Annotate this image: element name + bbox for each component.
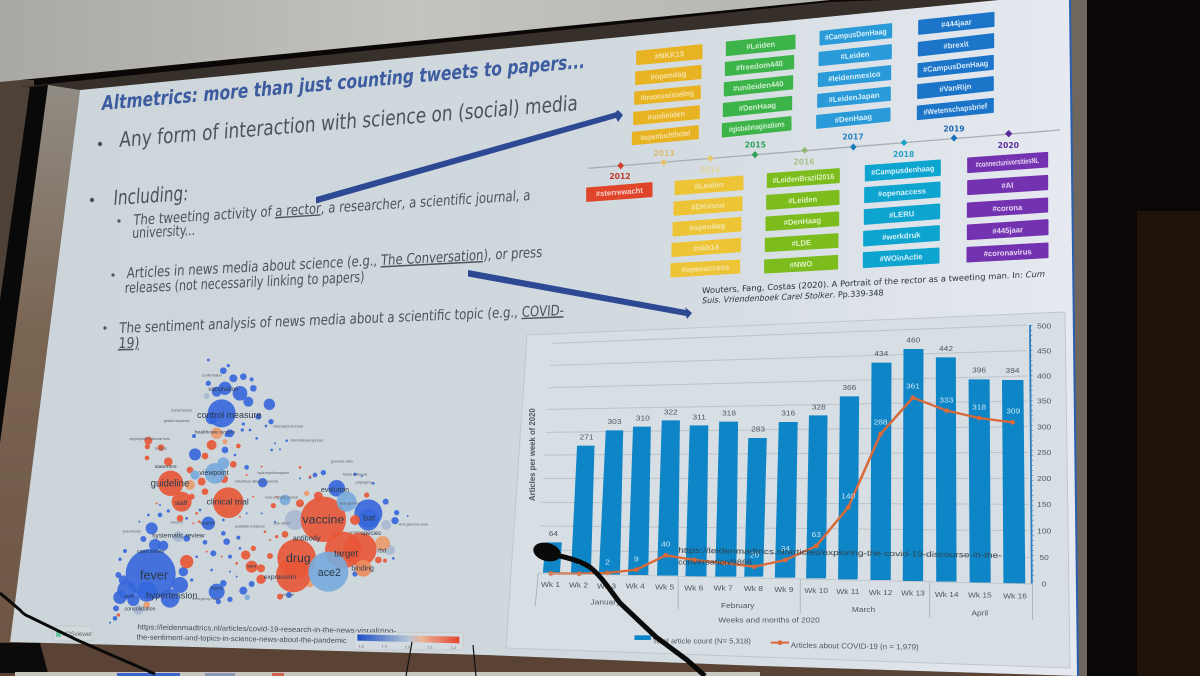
binding bubble xyxy=(355,560,372,577)
milestone: 2019: 2019 xyxy=(943,124,965,133)
small topic labels: international travel xyxy=(273,424,303,428)
small topic labels: viral genome xyxy=(340,501,360,505)
x axis week and month labels: Wk 16 xyxy=(1003,592,1027,601)
source URL for the bubble map xyxy=(137,622,397,645)
tag: #LDE xyxy=(791,238,811,248)
bar value labels: 271 xyxy=(580,433,594,442)
right axis: 350 xyxy=(1037,397,1052,406)
tag: #LERU xyxy=(889,209,915,220)
sub-bullet: sentiment analysis: 19) xyxy=(118,336,140,352)
bullet: including xyxy=(90,181,189,210)
sub-bullet: tweeting activity: The tweeting activity of a rector, a researcher, a scientific journal, a xyxy=(132,187,531,229)
milestone: 2012 xyxy=(609,162,631,181)
large topic labels: ards xyxy=(124,594,135,600)
large topic labels: search xyxy=(200,520,215,526)
tag: #CampusDenHaag xyxy=(923,59,989,74)
sub-bullet: news articles: releases (not necessarily linking to papers) xyxy=(124,270,365,297)
line: articles about COVID-19 xyxy=(548,395,1015,576)
overlaid chart URL: https://leidenmadtrics.nl/articles/exploring-the-covid-19-discourse-in-the- xyxy=(678,546,1002,560)
tag: #DenHaag xyxy=(834,112,873,125)
small topic labels xyxy=(123,374,428,601)
hashtag column 2020 xyxy=(967,153,1048,262)
large topic labels: drug xyxy=(286,551,311,565)
tag: #unileiden440 xyxy=(733,79,784,93)
small topic labels: emergency room xyxy=(192,597,220,601)
bar and line chart xyxy=(528,322,1052,652)
blue bubbles xyxy=(109,359,409,624)
tag: #Leiden xyxy=(694,180,724,191)
light bubbles xyxy=(133,393,395,615)
x axis week and month labels: Wk 9 xyxy=(774,585,794,594)
milestone: 2014: 2014 xyxy=(699,166,720,175)
timeline axis xyxy=(588,130,1060,168)
milestone: 2017 xyxy=(842,133,864,151)
line value labels: 2 xyxy=(605,558,610,566)
tag: #Leiden xyxy=(746,40,776,51)
bullet: any form of interaction xyxy=(98,90,579,152)
tag: #coronavirus xyxy=(983,247,1032,258)
small topic labels: phylogeny xyxy=(356,480,373,484)
hashtag column 2016 xyxy=(765,169,839,273)
bubble map of topics xyxy=(109,359,428,624)
right axis: 250 xyxy=(1037,448,1052,457)
colour scale legend: 2.1 xyxy=(427,644,434,649)
x axis week and month labels: March xyxy=(852,605,875,614)
large topic labels: antibody xyxy=(293,533,321,542)
bar value labels: 396 xyxy=(972,366,987,375)
overlaid chart URL: conversation/9866 xyxy=(678,558,753,566)
x axis week and month labels: Wk 13 xyxy=(901,589,925,598)
large topic labels: viewpoint xyxy=(199,470,229,477)
small topic labels: surgery xyxy=(155,446,167,450)
tag: #connectuniversitiesNL xyxy=(975,156,1039,169)
tag: #werkdruk xyxy=(882,230,921,242)
milestone: 2019 xyxy=(943,124,965,142)
red bubbles xyxy=(117,437,387,617)
x axis week and month labels: Wk 14 xyxy=(935,590,959,599)
tag: #Campusdenhaag xyxy=(871,164,935,177)
tag: #DKvsnu xyxy=(691,200,725,212)
small topic labels: new england journal xyxy=(265,495,298,499)
x axis week and month labels: January xyxy=(591,598,620,607)
title: Altmetrics: more than just counting tweets to papers... xyxy=(100,50,585,115)
large topic labels: healthcare system xyxy=(195,429,235,435)
tag: #openaccess xyxy=(681,263,730,274)
arrow: rector to timeline xyxy=(316,110,623,204)
large topic labels: injury xyxy=(211,585,223,591)
bar value labels: 64 xyxy=(549,529,559,538)
small topic labels: infectious diseases journal xyxy=(235,480,278,484)
tag: #openaccess xyxy=(878,186,926,199)
tag: #leidenmexico xyxy=(828,69,881,84)
tag: #nkk14 xyxy=(693,242,720,253)
source URL for the bubble map: https://leidenmadtrics.nl/articles/covid-19-research-in-the-news-visualizing- xyxy=(137,622,397,635)
hashtag column 2014 xyxy=(671,176,743,277)
milestone: 2013 xyxy=(653,149,675,166)
large topic labels: consolidation xyxy=(124,606,156,612)
x axis week and month labels: Wk 6 xyxy=(684,584,704,592)
sub-bullet: sentiment analysis xyxy=(103,303,564,352)
small topic labels: international spread xyxy=(291,438,323,442)
milestone: 2018 xyxy=(893,139,914,159)
line value labels: 309 xyxy=(1006,407,1021,415)
x axis week and month labels: Wk 15 xyxy=(968,591,992,600)
chart legend: Total article count (N= 5,318) xyxy=(653,637,751,645)
citation: Wouters, Fang, Costas (2020). A Portrait of the rector as a tweeting man. In: Cum xyxy=(702,269,1045,295)
milestone: 2015 xyxy=(745,141,766,158)
right axis: 0 xyxy=(1042,580,1047,589)
line value labels: 288 xyxy=(874,418,888,427)
sub-bullet: tweeting activity: university... xyxy=(132,223,196,242)
tag: #sterrewacht xyxy=(595,186,644,199)
right axis: 300 xyxy=(1037,423,1052,431)
tag: #VanRijn xyxy=(939,82,972,94)
tag: #Leiden xyxy=(840,50,870,61)
tag: #DenHaag xyxy=(738,100,777,113)
small topic labels: future outbreak xyxy=(343,472,367,476)
x axis week and month labels: February xyxy=(721,601,754,610)
tag: #troonswisseling xyxy=(640,88,695,103)
large topic labels: evolution xyxy=(321,487,349,494)
x axis week and month labels: Wk 4 xyxy=(626,582,645,591)
bar value labels: 283 xyxy=(751,425,766,434)
source URL for the bubble map: the-sentiment-and-topics-in-science-news-about-the-pandemic xyxy=(137,632,347,645)
small topic labels: pneumonia xyxy=(123,530,142,534)
citation: Suis. Vriendenboek Carel Stolker. Pp.339-348 xyxy=(702,287,884,305)
tag: #Leiden xyxy=(788,195,818,206)
tag: #444jaar xyxy=(941,17,972,30)
large topic labels: vaccination xyxy=(208,387,238,393)
large topic labels: target xyxy=(334,548,358,558)
right axis: 450 xyxy=(1037,347,1052,355)
line value labels: 0 xyxy=(577,558,582,567)
colour scale legend: 1.9 xyxy=(382,644,388,649)
hashtag column 2019 xyxy=(918,13,994,119)
bar value labels: 311 xyxy=(693,413,706,421)
small topic labels: appropriate national form xyxy=(130,437,170,441)
small topic labels: protein xyxy=(349,530,361,534)
hashtag column 2015 xyxy=(723,35,795,137)
bar value labels: 394 xyxy=(1006,366,1020,375)
large topic labels: rbd xyxy=(377,549,386,555)
bar value labels: 316 xyxy=(781,409,796,417)
right axis: 200 xyxy=(1037,474,1052,483)
bar value labels: 366 xyxy=(842,383,857,392)
small topic labels: viral genome level xyxy=(399,523,428,527)
bar value labels: 310 xyxy=(636,414,650,423)
arrow: The Conversation to chart xyxy=(468,270,692,319)
line value labels xyxy=(577,382,1021,567)
VOSviewer logo xyxy=(53,626,93,641)
line value labels: 318 xyxy=(972,403,987,411)
tag: #CampusDenHaag xyxy=(824,27,887,42)
large topic labels: systematic review xyxy=(152,532,205,539)
x axis week and month labels: Wk 12 xyxy=(869,588,893,597)
large topic labels: bat xyxy=(363,512,376,522)
line value labels: 63 xyxy=(812,530,821,539)
x axis week and month labels: Wk 8 xyxy=(744,584,763,593)
milestone: 2014 xyxy=(699,155,720,175)
hashtag column 2018 xyxy=(864,160,940,267)
colour scale legend: 2.2 xyxy=(451,645,457,650)
x axis week and month labels: Wk 2 xyxy=(569,581,589,590)
VOSviewer logo: VOSviewer xyxy=(62,632,92,638)
ceiling beam above the screen xyxy=(0,0,830,82)
x axis week and month labels: Wk 5 xyxy=(655,583,675,591)
x axis title: Weeks and months of 2020 xyxy=(718,616,820,625)
tag: #NWO xyxy=(789,259,813,270)
bar value labels: 322 xyxy=(664,408,678,417)
milestone: 2017: 2017 xyxy=(842,133,864,142)
chart legend: Articles about COVID-19 (n = 1,979) xyxy=(791,641,919,652)
bars: total article count xyxy=(543,349,1025,583)
colour scale legend xyxy=(354,633,463,650)
milestone: 2015: 2015 xyxy=(745,141,766,150)
tag: #LeidenJapan xyxy=(828,90,880,105)
large topic labels: guideline xyxy=(151,479,189,490)
light blue bubbles xyxy=(190,457,357,600)
sub-bullet: news articles xyxy=(111,244,543,297)
milestone: 2016: 2016 xyxy=(793,158,815,167)
small topic labels: confirmation xyxy=(202,374,222,378)
x axis week and month labels: Wk 3 xyxy=(597,582,617,590)
overlaid chart URL xyxy=(678,546,1002,566)
right axis: 500 xyxy=(1037,322,1052,330)
milestone: 2020: 2020 xyxy=(998,141,1019,150)
sub-bullet: news articles: Articles in news media about science (e.g., The Conversation), or press xyxy=(126,244,543,282)
y axis title: Articles per week of 2020 xyxy=(528,408,537,501)
tag: #globalimaginations xyxy=(728,120,785,134)
milestone: 2013: 2013 xyxy=(653,149,675,158)
sub-bullet: tweeting activity xyxy=(117,187,531,242)
x axis week and month labels: April xyxy=(971,609,988,618)
right axis xyxy=(1030,322,1052,589)
bar value labels xyxy=(549,336,1020,538)
large topic labels: staff xyxy=(175,500,187,507)
chart legend xyxy=(634,635,919,652)
tag: #DenHaag xyxy=(783,216,822,227)
bullet list xyxy=(90,90,579,352)
right axis: 150 xyxy=(1037,500,1052,509)
line value labels: 40 xyxy=(661,540,671,549)
large topic labels xyxy=(124,387,386,612)
large topic labels: statement xyxy=(155,464,177,470)
tag: #opendag xyxy=(689,221,726,233)
x axis week and month labels xyxy=(535,573,1033,620)
x axis week and month labels: Wk 1 xyxy=(541,580,561,589)
bar value labels: 303 xyxy=(608,417,622,426)
bar value labels: 442 xyxy=(939,344,954,353)
bar value labels: 434 xyxy=(874,349,889,358)
milestone: 2012: 2012 xyxy=(609,172,631,181)
microphone and cables xyxy=(0,540,705,676)
right axis: 400 xyxy=(1037,372,1052,381)
hashtag column 2017 xyxy=(817,24,891,128)
large topic labels: control measure xyxy=(197,410,262,420)
small topic labels: global response xyxy=(164,419,190,423)
x axis week and month labels: Wk 10 xyxy=(804,586,829,595)
milestone: 2020 xyxy=(998,130,1019,150)
colour scale legend: 2.0 xyxy=(405,644,411,649)
milestone: 2018: 2018 xyxy=(893,150,914,159)
bar and line chart panel xyxy=(506,312,1070,668)
line value labels: 140 xyxy=(841,492,856,500)
small topic labels: hydroxychloroquine xyxy=(257,471,289,475)
x axis week and month labels: Wk 11 xyxy=(836,587,860,596)
bar value labels: 318 xyxy=(722,409,737,417)
right axis: 50 xyxy=(1040,553,1049,562)
tag: #freedom440 xyxy=(735,59,783,73)
tag: #openluchthotel xyxy=(640,128,691,143)
tag: #445jaar xyxy=(992,225,1023,236)
tag: #opendag xyxy=(650,69,687,82)
tag: #AI xyxy=(1001,181,1014,190)
large topic labels: ace2 xyxy=(318,567,341,579)
tag: #Wetenschapsbrief xyxy=(923,101,988,117)
milestone: 2016 xyxy=(793,147,815,167)
small topic labels: side effect xyxy=(273,521,290,525)
hashtag column 2013 xyxy=(633,45,702,144)
tag: #WOinActie xyxy=(879,252,923,264)
tag: #brexit xyxy=(943,39,969,51)
line value labels: 20 xyxy=(750,551,760,560)
large topic labels: expression xyxy=(264,574,296,581)
line value labels: 9 xyxy=(634,555,639,564)
bullet: any form of interaction: Any form of interaction with science on (social) media xyxy=(119,90,579,152)
large topic labels: species xyxy=(361,531,381,537)
x axis week and month labels: Wk 7 xyxy=(714,584,733,593)
tag: #NKK13 xyxy=(654,49,684,61)
tag: #corona xyxy=(992,203,1023,213)
small topic labels: transmission xyxy=(171,409,192,413)
large topic labels: vaccine xyxy=(302,513,344,527)
line value labels: 361 xyxy=(906,382,920,391)
line value labels: 333 xyxy=(939,396,954,404)
tag: #unileiden xyxy=(647,109,686,122)
colour scale legend: 1.8 xyxy=(358,644,365,649)
small topic labels: genomic data xyxy=(331,460,354,464)
large topic labels: case series xyxy=(137,549,164,555)
line value labels: 34 xyxy=(781,544,791,553)
tag: #LeidenBrazil2016 xyxy=(772,172,835,185)
large topic labels: hypertension xyxy=(146,591,197,601)
large topic labels: sars xyxy=(247,563,257,569)
small topic labels: cell line xyxy=(282,593,294,597)
timeline of hashtags xyxy=(587,13,1060,305)
right axis: 100 xyxy=(1037,527,1052,535)
sub-bullet: sentiment analysis: The sentiment analysis of news media about a scientific topic (e.g., COVID- xyxy=(118,303,564,337)
large topic labels: clinical trial xyxy=(206,496,249,506)
bullet: including: Including: xyxy=(113,181,189,210)
large topic labels: binding xyxy=(351,565,374,572)
hashtag column 2012 xyxy=(587,183,652,201)
bar value labels: 328 xyxy=(812,403,826,411)
small topic labels: chest ct xyxy=(170,520,183,524)
small topic labels: available evidence xyxy=(235,524,265,528)
large topic labels: fever xyxy=(140,568,168,582)
bar value labels: 460 xyxy=(906,336,921,345)
